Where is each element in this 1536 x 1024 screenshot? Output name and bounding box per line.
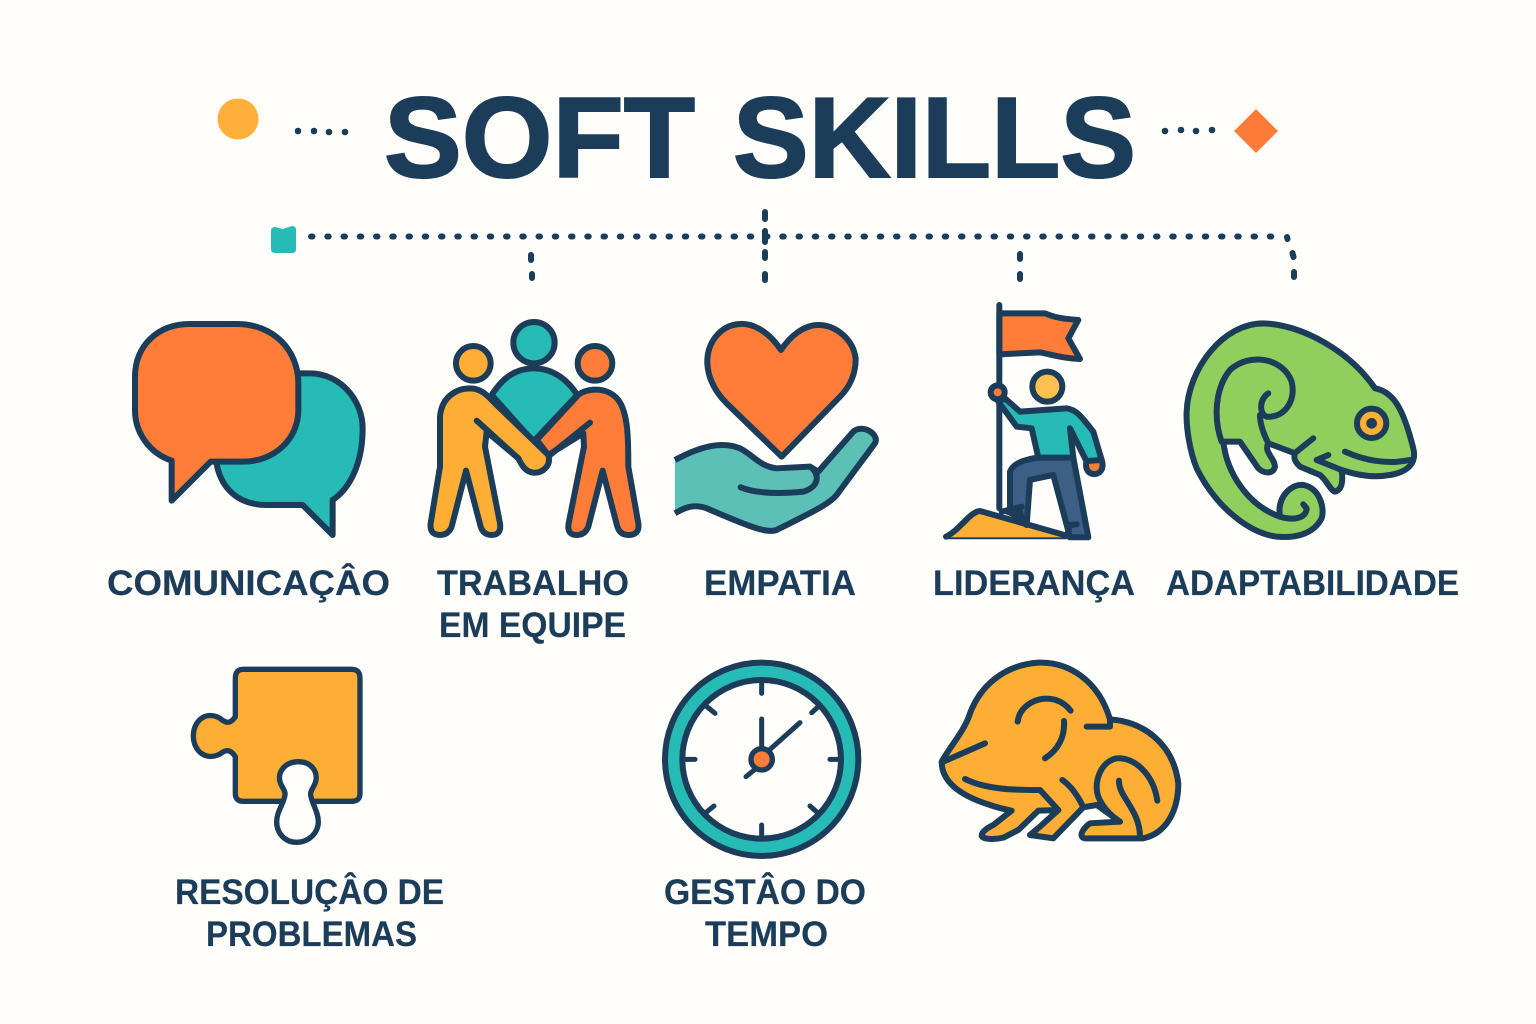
icon: orange diamond (1234, 109, 1278, 153)
label: empatia: EMPATIA (704, 564, 856, 603)
label: resolução de problemas: PROBLEMAS (206, 915, 417, 954)
dotted connector tree (311, 212, 1294, 280)
label: trabalho em equipe (437, 564, 629, 645)
label: liderança: LIDERANÇA (933, 564, 1135, 603)
icon: green chameleon (1187, 323, 1414, 537)
icon: clock (665, 663, 858, 856)
label: gestão do tempo (664, 872, 866, 954)
icon: orange creature (942, 663, 1178, 839)
title (384, 75, 1136, 202)
icon: heart in hand (675, 324, 876, 531)
icon: teamwork (431, 322, 639, 535)
label: trabalho em equipe: TRABALHO (437, 564, 629, 603)
label: resolução de problemas: RESOLUÇÂO DE (175, 872, 444, 912)
icon: yellow circle (218, 98, 258, 140)
icon: teal tag (271, 226, 296, 253)
label: adaptabilidade: ADAPTABILIDADE (1166, 564, 1459, 603)
icon: leader with flag (945, 305, 1103, 538)
title: SKILLS (733, 75, 1136, 202)
icon: puzzle piece (193, 669, 360, 842)
label: gestão do tempo: GESTÂO DO (664, 872, 866, 912)
left title dots (295, 128, 348, 135)
label: trabalho em equipe: EM EQUIPE (439, 606, 626, 645)
right title dots (1162, 127, 1215, 134)
label: gestão do tempo: TEMPO (705, 915, 828, 954)
icon: speech bubbles (135, 324, 363, 535)
label: resolução de problemas (175, 872, 444, 954)
label: comunicação: COMUNICAÇÂO (107, 563, 390, 603)
title: SOFT (384, 75, 695, 202)
